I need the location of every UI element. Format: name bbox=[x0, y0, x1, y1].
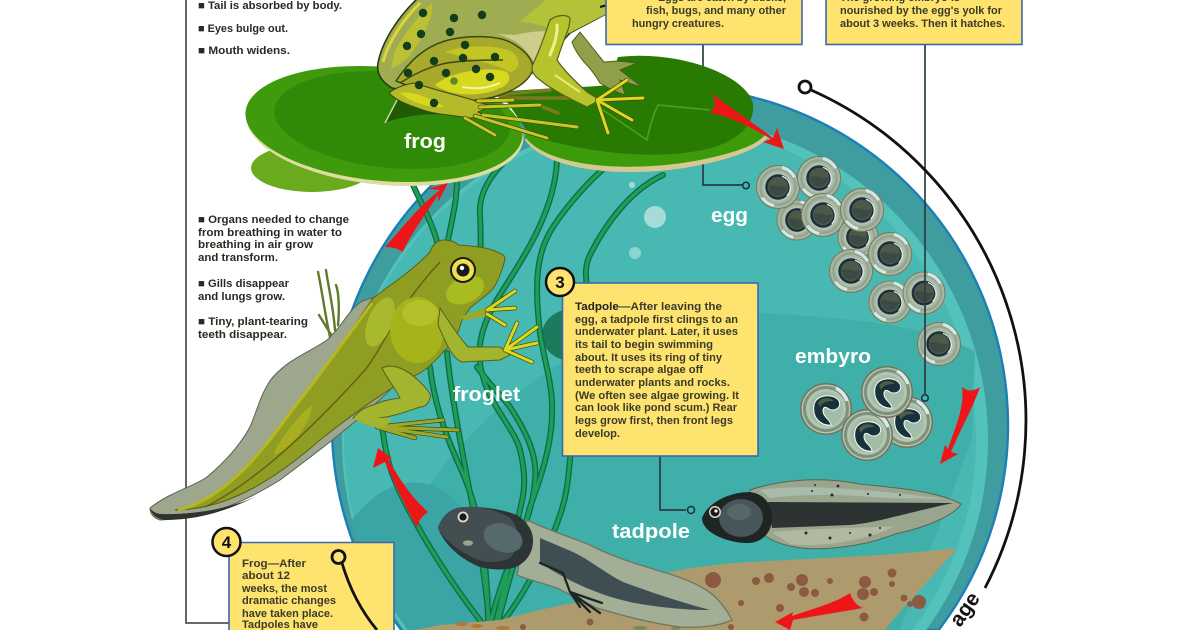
connector: egg bbox=[703, 44, 743, 185]
froglet tail fin bbox=[150, 298, 392, 520]
callout: egg box bbox=[606, 0, 802, 44]
callout: tadpole box: (We often see algae growing. It bbox=[575, 390, 739, 402]
callout: tadpole box: about. It uses its ring of tiny bbox=[575, 352, 723, 364]
callout: frog box: have taken place. bbox=[242, 608, 333, 620]
callout: froglet bullets: teeth disappear. bbox=[198, 329, 287, 341]
callout: frog box: weeks, the most bbox=[241, 583, 327, 595]
arrow: frog to egg bbox=[710, 93, 784, 149]
box arc end bbox=[342, 563, 377, 630]
froglet highlights bbox=[359, 293, 401, 351]
callout: tadpole box: can look like pond scum.) Rear bbox=[575, 402, 738, 414]
label: tadpole: tadpole bbox=[612, 521, 690, 543]
number badge 4: 4 bbox=[222, 533, 232, 552]
pond circle bbox=[332, 87, 1008, 630]
far hind toes bbox=[497, 90, 570, 113]
callout: embryo box: nourished by the egg's yolk for bbox=[840, 5, 1003, 17]
callout: froglet bullets: ■ Organs needed to change bbox=[198, 214, 349, 226]
number badge 3: 3 bbox=[555, 273, 565, 292]
small background plant bbox=[318, 270, 339, 337]
label: embryo: embyro bbox=[795, 346, 871, 368]
arc label: stage: age bbox=[945, 588, 985, 630]
callout: tadpole box: develop. bbox=[575, 428, 620, 440]
froglet body and tail muscle bbox=[175, 240, 505, 510]
number badge 4 bbox=[212, 528, 240, 556]
callout: top left bullets: ■ Eyes bulge out. bbox=[198, 23, 288, 35]
callout: froglet bullets: from breathing in water to bbox=[198, 227, 342, 239]
lower hind leg and foot bbox=[389, 83, 492, 118]
embryos cluster bbox=[800, 366, 933, 461]
froglet eye bbox=[450, 257, 476, 283]
callout: frog box bbox=[229, 542, 394, 630]
eggs cluster bbox=[756, 156, 961, 366]
froglet hind leg bbox=[353, 366, 431, 420]
callout: froglet bullets: and transform. bbox=[198, 252, 278, 264]
life cycle arc bbox=[799, 81, 1026, 588]
connector dot: embryo bbox=[922, 395, 928, 401]
tadpole hind leg bbox=[540, 563, 602, 613]
label: egg: egg bbox=[711, 205, 748, 227]
icon: large tadpole bbox=[438, 507, 732, 627]
callout: tadpole box: egg, a tadpole first clings to an bbox=[575, 314, 738, 326]
number badge 3 bbox=[546, 268, 574, 296]
callout: frog box: dramatic changes bbox=[242, 595, 336, 607]
connector dot: egg bbox=[743, 182, 749, 189]
callout: froglet bullets bbox=[198, 214, 349, 341]
lower pale lily pad bbox=[251, 144, 373, 192]
callout: egg box: fish, bugs, and many other bbox=[646, 5, 787, 17]
far foreleg bbox=[572, 32, 642, 95]
connector: embryo bbox=[924, 44, 926, 394]
callout: top left bullets: ■ Tail is absorbed by body. bbox=[198, 0, 342, 12]
callout: embryo box: about 3 weeks. Then it hatches. bbox=[840, 18, 1005, 30]
thigh bbox=[396, 37, 533, 101]
callout: tadpole box: legs grow first, then front legs bbox=[575, 415, 733, 427]
callout: froglet bullets: ■ Gills disappear bbox=[198, 278, 290, 290]
icon: small tadpole bbox=[702, 480, 961, 549]
left guide line bbox=[186, 0, 230, 623]
arrow: sand bbox=[775, 593, 863, 630]
callout: tadpole box: Tadpole—After leaving the bbox=[575, 301, 722, 313]
connector: tadpole bbox=[660, 456, 686, 510]
label: frog: frog bbox=[404, 131, 446, 153]
callout: froglet bullets: ■ Tiny, plant-tearing bbox=[198, 316, 308, 328]
dark plant blob bbox=[542, 309, 602, 361]
arrow: embryo to tadpole bbox=[940, 387, 980, 464]
callout: tadpole box: underwater plants and rocks. bbox=[575, 377, 730, 389]
callout: frog box: about 12 bbox=[242, 570, 290, 582]
callout: frog box: Frog—After bbox=[242, 558, 307, 570]
callout: top left bullets: ■ Mouth widens. bbox=[198, 45, 290, 57]
near foreleg bbox=[532, 16, 600, 107]
callout: tadpole box: teeth to scrape algae off bbox=[575, 364, 703, 376]
right lily pad bbox=[500, 56, 768, 172]
main lily pad bbox=[241, 55, 529, 197]
callout: top left bullets bbox=[198, 0, 342, 57]
callout: tadpole box bbox=[562, 283, 758, 456]
callout: embryo box bbox=[826, 0, 1022, 44]
pond bottom sand bbox=[415, 548, 957, 630]
callout: egg box: hungry creatures. bbox=[632, 18, 724, 30]
callout: tadpole box: its tail to begin swimming bbox=[575, 339, 713, 351]
label: froglet: froglet bbox=[453, 384, 520, 406]
icon: adult frog bbox=[378, 0, 643, 138]
bubbles bbox=[629, 182, 666, 259]
icon: froglet bbox=[150, 240, 537, 520]
connector dot tadpole bbox=[688, 506, 694, 514]
lily pads bbox=[241, 55, 768, 197]
front toes bbox=[597, 80, 643, 133]
frog back and head bbox=[378, 0, 632, 98]
red cycle arrows bbox=[373, 93, 980, 630]
brown pebbles bbox=[456, 568, 926, 630]
pond plants bbox=[380, 153, 663, 628]
spots bbox=[403, 9, 499, 107]
froglet foreleg bbox=[438, 308, 510, 362]
callout: froglet bullets: and lungs grow. bbox=[198, 291, 285, 303]
callout: tadpole box: underwater plant. Later, it uses bbox=[575, 326, 738, 338]
callout: froglet bullets: breathing in air grow bbox=[198, 239, 313, 251]
arrow: tadpole to froglet bbox=[373, 448, 428, 528]
arrow: froglet to frog bbox=[385, 183, 448, 252]
